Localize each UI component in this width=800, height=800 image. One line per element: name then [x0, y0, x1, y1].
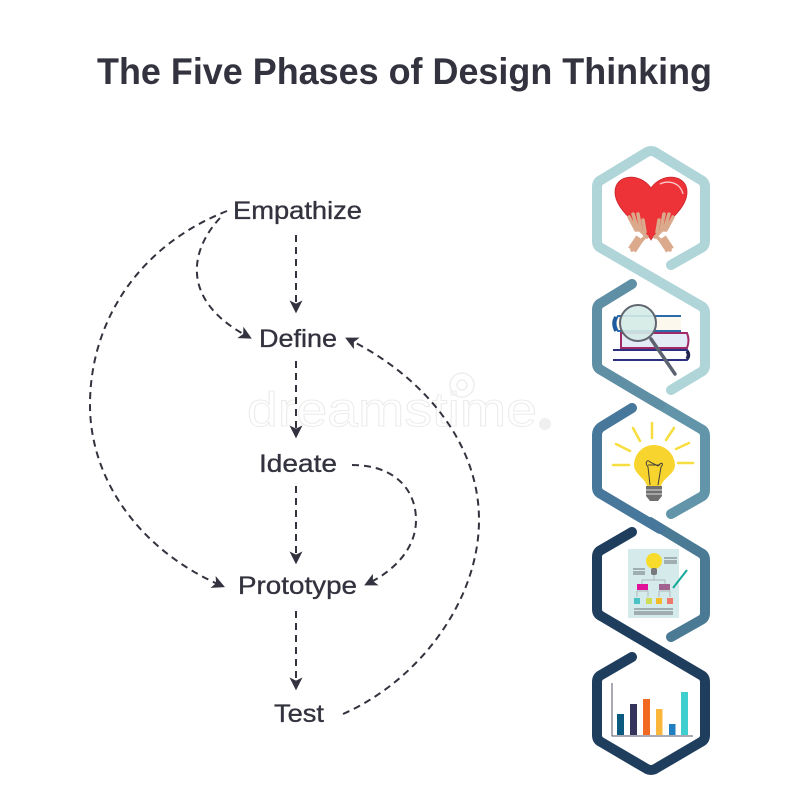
bulb glass [634, 445, 675, 486]
left hand [629, 214, 647, 250]
hexagon chain [597, 151, 705, 770]
top book [616, 316, 681, 331]
arrow: Prototype to Test [295, 611, 297, 685]
icon: heart with hands [615, 177, 687, 250]
sheet [628, 549, 679, 618]
watermark: dreamstime [247, 384, 537, 437]
right forearm [662, 238, 670, 250]
label: Define: Define [259, 325, 337, 353]
bars [617, 714, 624, 735]
icon: bar chart [612, 683, 693, 736]
label: Ideate: Ideate [259, 450, 337, 478]
hexagon 5 outline [597, 645, 705, 770]
magnifier lens [620, 305, 656, 341]
arrow: Ideate to Prototype, curved [352, 465, 416, 583]
label: Test: Test [274, 700, 324, 728]
hexagon 3 outline [597, 408, 660, 529]
hexagon 3 right side [650, 399, 705, 514]
right hand [655, 214, 673, 250]
flow connectors [637, 575, 670, 597]
text lines [633, 558, 677, 614]
label: Prototype: Prototype [238, 572, 357, 600]
bottom book spine [687, 351, 688, 359]
axes [612, 683, 693, 736]
hexagon 4 outline [597, 532, 701, 675]
flow diagram [90, 197, 479, 728]
magnifier handle [651, 339, 675, 374]
arrow: Empathize to Define, inner [197, 218, 247, 336]
hexagon 4 right side [650, 522, 705, 637]
watermark [247, 373, 551, 437]
label: Empathize: Empathize [233, 197, 362, 225]
icon: light bulb [613, 423, 693, 501]
heart highlight [660, 182, 683, 194]
hexagon 2 outline [597, 284, 660, 405]
arrow: Define to Ideate [295, 361, 297, 433]
title: The Five Phases of Design Thinking [97, 51, 712, 92]
base thread lines [646, 490, 662, 494]
chart boxes [637, 584, 648, 590]
arrow: Empathize to Define [295, 235, 297, 308]
filament [646, 461, 662, 485]
hexagon 1 outline [597, 151, 705, 390]
bottom book [613, 350, 689, 360]
middle book [621, 333, 688, 348]
icon: books and magnifier [613, 305, 689, 374]
arrow: Empathize to Prototype [90, 211, 227, 585]
icon: prototype document [628, 549, 687, 618]
top book spine [614, 317, 616, 331]
pen [673, 570, 687, 588]
arrow: Ideate to Prototype [295, 486, 297, 559]
arrow: Test to Define [343, 340, 479, 714]
small bulb [646, 553, 662, 569]
left forearm [632, 238, 640, 250]
heart [615, 177, 687, 240]
rays [613, 423, 693, 465]
bulb base [646, 486, 662, 501]
